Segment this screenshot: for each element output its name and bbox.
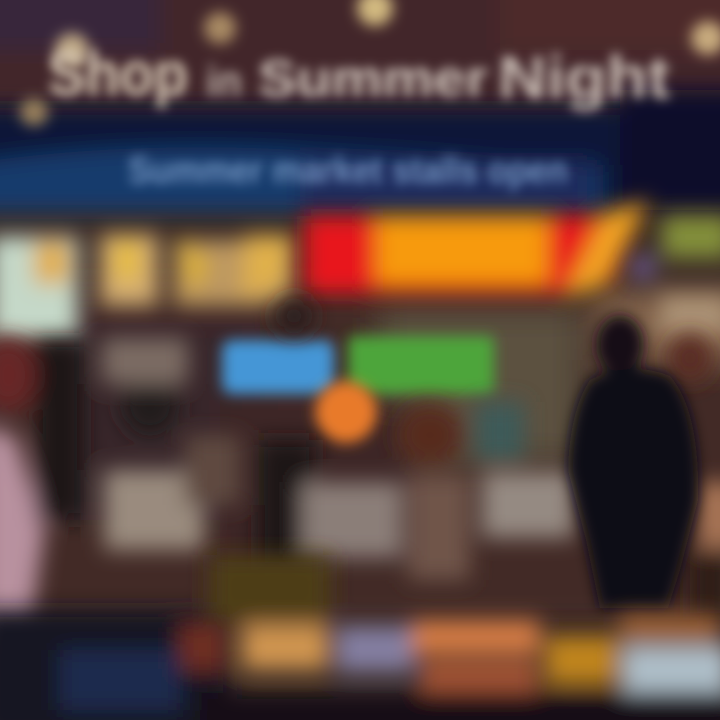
navy sign band	[0, 90, 720, 212]
blue sign	[222, 340, 334, 394]
ceiling lamps	[20, 0, 720, 126]
orange round sign	[315, 381, 377, 443]
background: market interior	[0, 290, 720, 630]
left cream stalls	[0, 234, 294, 340]
title: Summer	[258, 50, 488, 108]
title: in	[206, 57, 242, 106]
produce stall	[0, 555, 720, 720]
right side green sign	[632, 216, 720, 336]
shopper: pale centre figures	[302, 482, 402, 558]
shopper: dark centre figure	[274, 296, 314, 336]
subtitle: Summer market stalls open	[128, 150, 568, 192]
shopper: grey figure	[120, 373, 180, 437]
shopper: right edge figure	[668, 334, 712, 382]
crowd of shoppers	[0, 296, 720, 630]
brick ceiling band	[0, 0, 720, 110]
green sign	[348, 336, 494, 394]
shopper: left pink figure	[0, 425, 45, 630]
title: Shop	[48, 40, 188, 109]
title: Night	[498, 44, 670, 111]
dark silhouette figure	[568, 315, 698, 608]
red and orange banner	[304, 200, 650, 296]
title	[48, 40, 670, 111]
